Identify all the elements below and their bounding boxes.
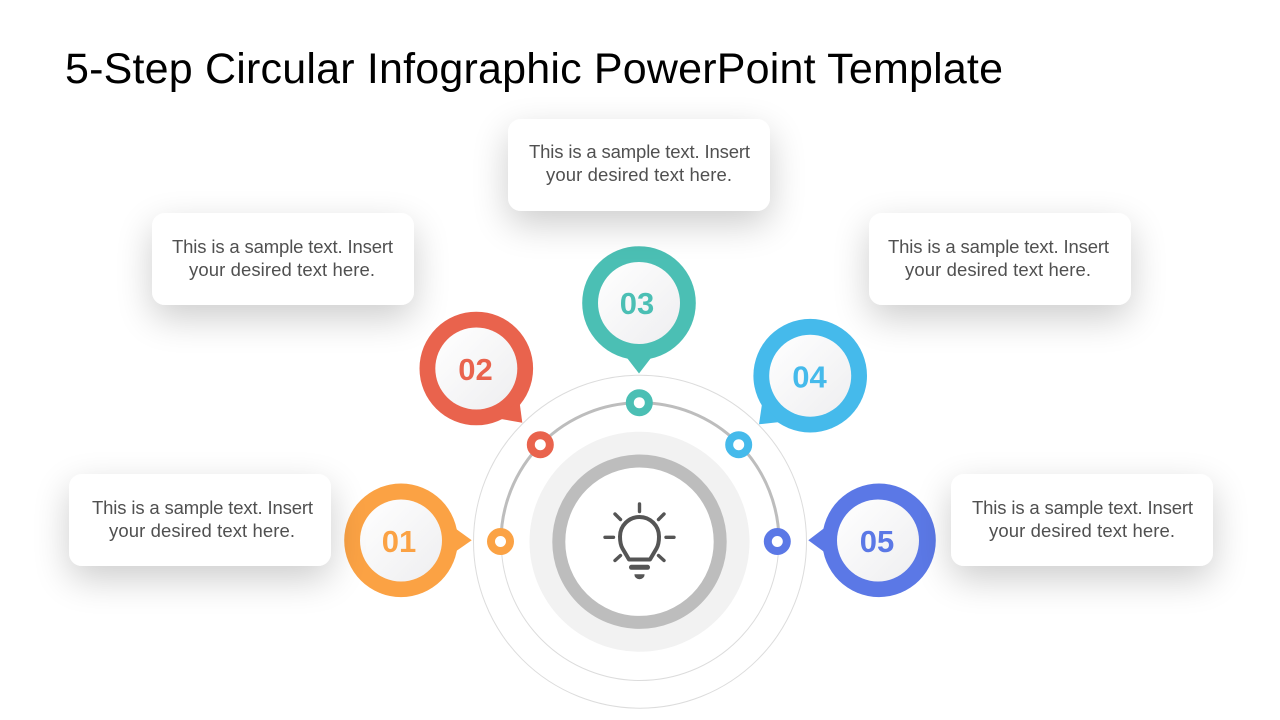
card: step 02 text: This is a sample text. Insert (172, 236, 393, 257)
card: step 01 text: This is a sample text. Insert (92, 497, 313, 518)
marker: step 01 (491, 532, 510, 551)
pin: step 01 (344, 484, 472, 597)
pin: step 05: 05 (860, 524, 894, 559)
card: step 03 text (508, 119, 770, 211)
central circular diagram (474, 375, 806, 708)
marker: step 05 (768, 532, 787, 551)
pin: step 05 (808, 484, 936, 597)
pin: step 04: 04 (792, 360, 827, 394)
card: step 01 text (69, 474, 331, 566)
marker: step 03 (630, 393, 649, 412)
card: step 03 text: This is a sample text. Insert (529, 141, 750, 162)
pin: step 01: 01 (382, 524, 416, 559)
card: step 02 text (152, 213, 414, 305)
pin: step 03 (582, 246, 696, 374)
card: step 05 text (951, 474, 1213, 566)
card: step 04 text: your desired text here. (905, 259, 1091, 280)
marker: step 04 (729, 435, 748, 454)
card: step 02 text: your desired text here. (189, 259, 375, 280)
title: 5-Step Circular Infographic PowerPoint Template (65, 45, 1003, 93)
card: step 04 text (869, 213, 1131, 305)
pin: step 04 (753, 319, 867, 433)
pin: step 03: 03 (620, 286, 654, 321)
card: step 05 text: your desired text here. (989, 520, 1175, 541)
icon: light bulb (605, 504, 674, 579)
pin: step 02: 02 (458, 352, 493, 387)
card: step 04 text: This is a sample text. Insert (888, 236, 1109, 257)
card: step 03 text: your desired text here. (546, 164, 732, 185)
marker: step 02 (531, 435, 550, 454)
card: step 01 text: your desired text here. (109, 520, 295, 541)
pin: step 02 (420, 312, 533, 425)
card: step 05 text: This is a sample text. Insert (972, 497, 1193, 518)
